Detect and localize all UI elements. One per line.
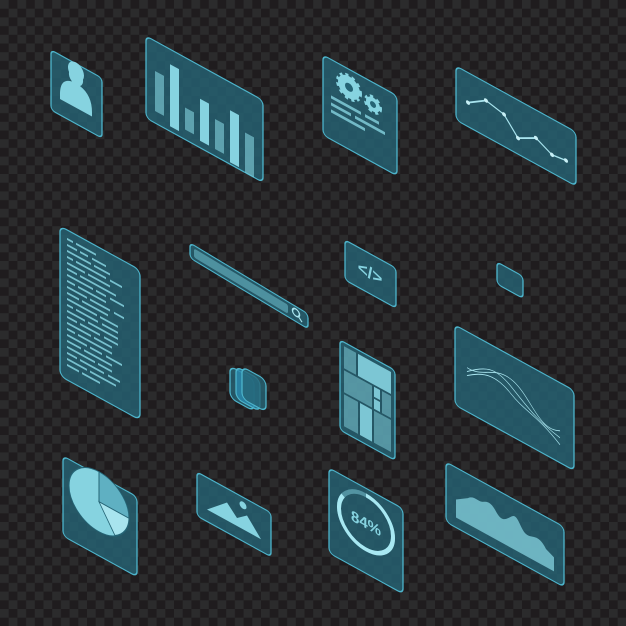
panel: bar chart — [146, 36, 263, 182]
panel: grid layout — [340, 340, 395, 460]
panel: code document — [60, 226, 140, 420]
code symbol text: </> — [358, 256, 382, 289]
panel: wave chart — [455, 325, 574, 470]
panel: image placeholder — [197, 472, 271, 557]
panel: search bar — [190, 243, 308, 329]
panel: code tag — [345, 240, 396, 308]
panel: pie chart — [63, 452, 137, 577]
icon: mountains — [207, 492, 261, 539]
search input — [194, 248, 288, 314]
grid blocks — [344, 346, 391, 452]
code lines — [67, 238, 124, 397]
panel: progress 84% — [329, 468, 403, 594]
area chart — [456, 484, 554, 571]
icon: person — [60, 54, 92, 117]
panel: area chart — [446, 462, 564, 587]
icon: gears — [338, 70, 380, 115]
panel: user profile — [51, 49, 102, 138]
percentage text: 84% — [351, 507, 381, 540]
icon: magnifier — [292, 307, 302, 322]
panel: settings gears — [323, 55, 397, 176]
panel: small square — [497, 262, 523, 298]
text lines — [331, 95, 385, 142]
panel: line chart — [456, 66, 576, 186]
line chart — [468, 91, 566, 164]
bars — [155, 56, 254, 177]
pie chart — [69, 455, 129, 548]
progress ring — [339, 480, 393, 564]
icon: stacked layers — [230, 360, 266, 418]
wave lines — [467, 354, 560, 445]
